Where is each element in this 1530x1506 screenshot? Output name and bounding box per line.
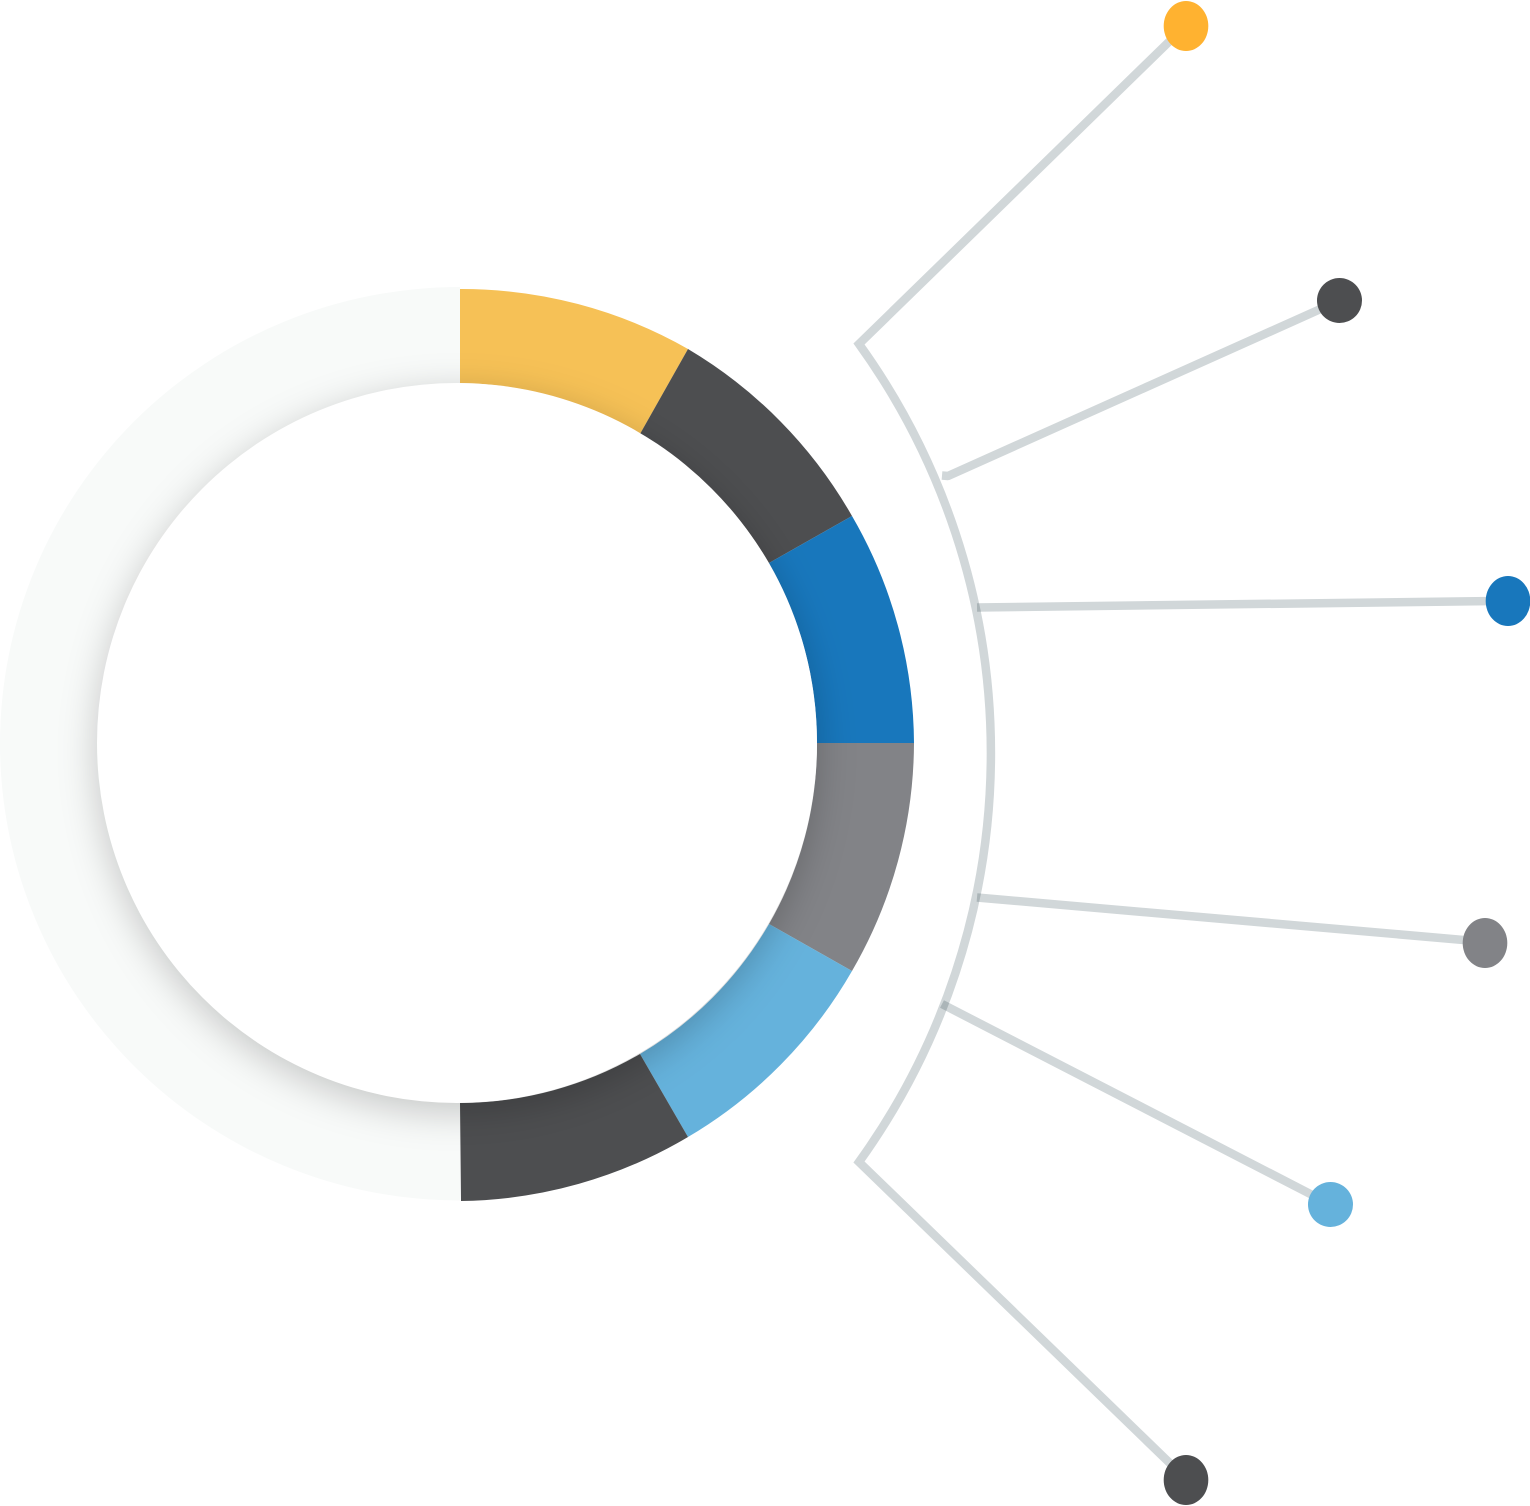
ring segment: dark grey lower xyxy=(460,1054,688,1201)
connector line to grey dot xyxy=(977,898,1475,941)
dot: blue xyxy=(1486,576,1530,626)
ring segment: light blue xyxy=(640,924,852,1137)
bracket arc with connector arms xyxy=(859,31,1180,1473)
ring segment: empty light track (left half) xyxy=(0,287,460,1200)
dot: yellow xyxy=(1164,1,1208,51)
connector line to light blue dot xyxy=(942,1004,1320,1199)
ring segment: dark grey upper xyxy=(640,349,852,563)
dot: dark grey upper xyxy=(1317,278,1362,323)
ring segment: yellow xyxy=(460,289,688,434)
dot: dark grey lower xyxy=(1164,1455,1208,1505)
connector line to dark dot xyxy=(942,307,1325,476)
donut ring chart xyxy=(0,287,914,1201)
dot: mid grey xyxy=(1463,918,1507,968)
ring segment: mid grey xyxy=(769,743,914,971)
connector line to blue dot xyxy=(977,601,1495,608)
white centre of the ring xyxy=(97,383,817,1103)
ring segment: blue xyxy=(769,516,914,743)
inner shadow cast on the ring xyxy=(97,392,817,1112)
dot: light blue xyxy=(1308,1182,1353,1227)
